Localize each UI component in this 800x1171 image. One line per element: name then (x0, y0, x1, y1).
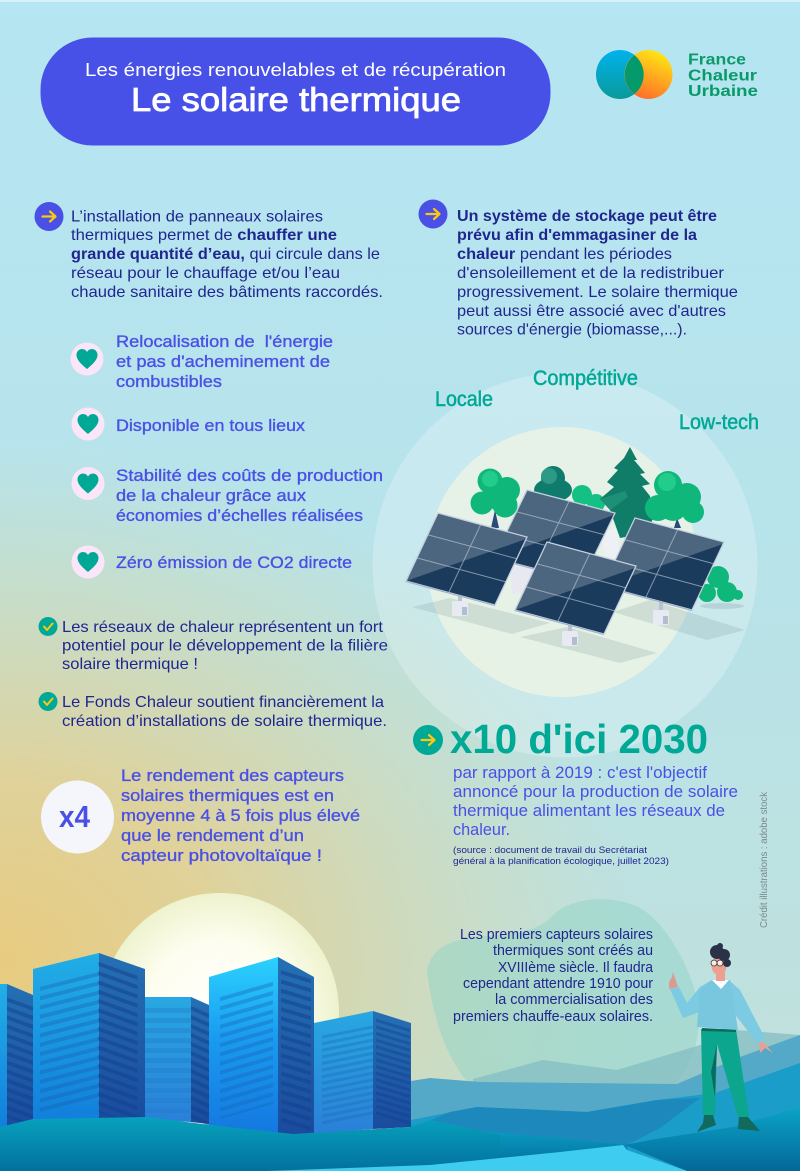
text block: objectif (453, 764, 738, 839)
keyword: Low-tech: Low-tech (679, 411, 759, 434)
logo: France Chaleur Urbaine: France (688, 52, 746, 68)
check item: potentiel: solaire thermique ! (62, 656, 198, 673)
text block: intro left (71, 208, 383, 301)
x4 badge: x4 (59, 799, 91, 834)
panel stand: right (653, 602, 669, 625)
keyword: Locale: Locale (435, 388, 493, 411)
text block: intro left: grande quantité d’eau, qui circule dans le (71, 246, 380, 263)
logo: France Chaleur Urbaine (596, 50, 758, 100)
benefit: stabilité des coûts: de la chaleur grâce aux (116, 486, 307, 505)
source note (453, 845, 669, 867)
trousers (701, 1029, 749, 1117)
title banner (40, 38, 550, 146)
building 1 (0, 984, 33, 1128)
check item: potentiel (38, 617, 388, 673)
trouser shadow (711, 1044, 717, 1097)
city buildings (0, 953, 411, 1134)
benefit: relocalisation (70, 332, 333, 391)
benefit: zéro émission: Zéro émission de CO2 directe (116, 553, 352, 572)
benefit list (70, 332, 383, 578)
tree: left (470, 468, 520, 528)
text block: intro right: peut aussi être associé avec d'autres (457, 303, 726, 320)
collar (712, 980, 729, 989)
boots (697, 1115, 760, 1132)
check item: potentiel: Les réseaux de chaleur représentent un fort (62, 619, 384, 636)
panel stand: front (562, 623, 578, 646)
panel: left (406, 513, 527, 606)
arm: raised (670, 980, 712, 1018)
text block: intro right: sources d'énergie (biomasse,...). (457, 322, 687, 338)
benefit: relocalisation: Relocalisation de l'énergie (116, 332, 333, 351)
illustration: man pointing (669, 943, 773, 1132)
blob behind anecdote (427, 899, 699, 1120)
arm: right (730, 981, 765, 1043)
arrow icon: intro left (34, 202, 64, 231)
head (710, 943, 731, 981)
building 2 (33, 953, 145, 1120)
panel shadows (412, 528, 745, 663)
benefit: disponible (72, 408, 306, 440)
benefit: stabilité des coûts: économies d’échelles réalisées (116, 506, 363, 525)
text block: intro right: prévu afin d'emmagasiner de la (457, 227, 697, 244)
text block: anecdote: Les premiers capteurs solaires (460, 927, 653, 943)
text block: intro right: Un système de stockage peut être (457, 208, 717, 225)
text block: intro left: L’installation de panneaux solaires (71, 208, 323, 226)
mountains (411, 1030, 800, 1171)
sweater (697, 980, 738, 1030)
x4 badge (41, 780, 114, 854)
panel stand: left (452, 593, 468, 616)
text block: rendement: que le rendement d’un (121, 826, 304, 845)
text block: intro left: chaude sanitaire des bâtiments raccordés. (71, 284, 383, 301)
text block: objectif: chaleur. (453, 821, 510, 839)
text block: intro left: réseau pour le chauffage et/ou l’eau (71, 265, 340, 282)
check item: fonds chaleur: Le Fonds Chaleur soutient financièrement la (62, 694, 384, 711)
tree: small green (572, 485, 605, 512)
illustration: solar panels and trees (406, 447, 745, 663)
illustration backdrop circles (372, 372, 758, 758)
tree: dark back (534, 466, 572, 502)
text block: rendement: solaires thermiques est en (121, 786, 334, 805)
panel: back middle (494, 490, 615, 582)
text block: anecdote: XVIIIème siècle. Il faudra (498, 960, 654, 976)
foreground ground (0, 1117, 687, 1171)
text block: intro right: d'ensoleillement et de la redistribuer (457, 265, 725, 282)
text block: anecdote: thermiques sont créés au (493, 943, 653, 959)
title banner: Le solaire thermique (131, 82, 461, 119)
building 4 (209, 957, 314, 1134)
building 5 (314, 1011, 411, 1134)
check item: potentiel: potentiel pour le développement de la filière (62, 638, 388, 654)
text block: rendement: capteur photovoltaïque ! (121, 846, 322, 865)
panel: right (603, 518, 724, 611)
title banner: Les énergies renouvelables et de récupération (85, 60, 506, 80)
tree: pine (600, 447, 653, 538)
hand: right (759, 1042, 773, 1053)
logo: France Chaleur Urbaine: Chaleur (688, 68, 757, 84)
benefit: disponible: Disponible en tous lieux (116, 416, 306, 435)
source note: (source : document de travail du Secrétariat (453, 845, 647, 856)
building 3 (145, 997, 209, 1124)
text block: rendement: Le rendement des capteurs (121, 766, 344, 785)
text block: anecdote: premiers chauffe-eaux solaires. (453, 1009, 653, 1025)
benefit: stabilité des coûts (72, 466, 383, 525)
benefit: relocalisation: et pas d'acheminement de (116, 352, 330, 371)
tree: right (645, 471, 704, 528)
text block: intro right: chaleur pendant les périodes (457, 246, 672, 263)
text block: rendement: moyenne 4 à 5 fois plus élevé (121, 806, 360, 825)
text block: anecdote (453, 927, 654, 1025)
logo: France Chaleur Urbaine: Urbaine (688, 83, 758, 100)
check item: fonds chaleur: création d’installations de solaire thermique. (62, 713, 387, 730)
text block: intro right: progressivement. Le solaire thermique (457, 284, 738, 301)
image credit: Crédit illustrations : adobe stock (759, 791, 770, 928)
text block: intro right (457, 208, 738, 338)
waistband (702, 1028, 736, 1032)
text block: anecdote: cependant attendre 1910 pour (463, 976, 653, 992)
panel: front (515, 542, 636, 635)
benefit: stabilité des coûts: Stabilité des coûts de production (116, 466, 383, 485)
benefit: zéro émission (72, 546, 352, 578)
headline: x10 d'ici 2030: x10 d'ici 2030 (450, 716, 708, 762)
benefit: relocalisation: combustibles (116, 372, 222, 391)
source note: général à la planification écologique, juillet 2023) (453, 856, 669, 867)
text block: rendement (121, 766, 360, 865)
text block: objectif: thermique alimentant les réseaux de (453, 802, 725, 820)
sun (101, 893, 339, 1131)
check item: fonds chaleur (38, 692, 387, 730)
keyword: Compétitive: Compétitive (533, 367, 638, 390)
bush: right (698, 566, 744, 609)
text block: anecdote: la commercialisation des (495, 992, 653, 1008)
text block: intro left: thermiques permet de chauffer une (71, 227, 337, 244)
arrow icon: intro right (418, 200, 448, 228)
text block: objectif: par rapport à 2019 : c'est l'objectif (453, 764, 707, 782)
text block: objectif: annoncé pour la production de solaire (453, 783, 738, 801)
hand: raised (669, 972, 678, 989)
